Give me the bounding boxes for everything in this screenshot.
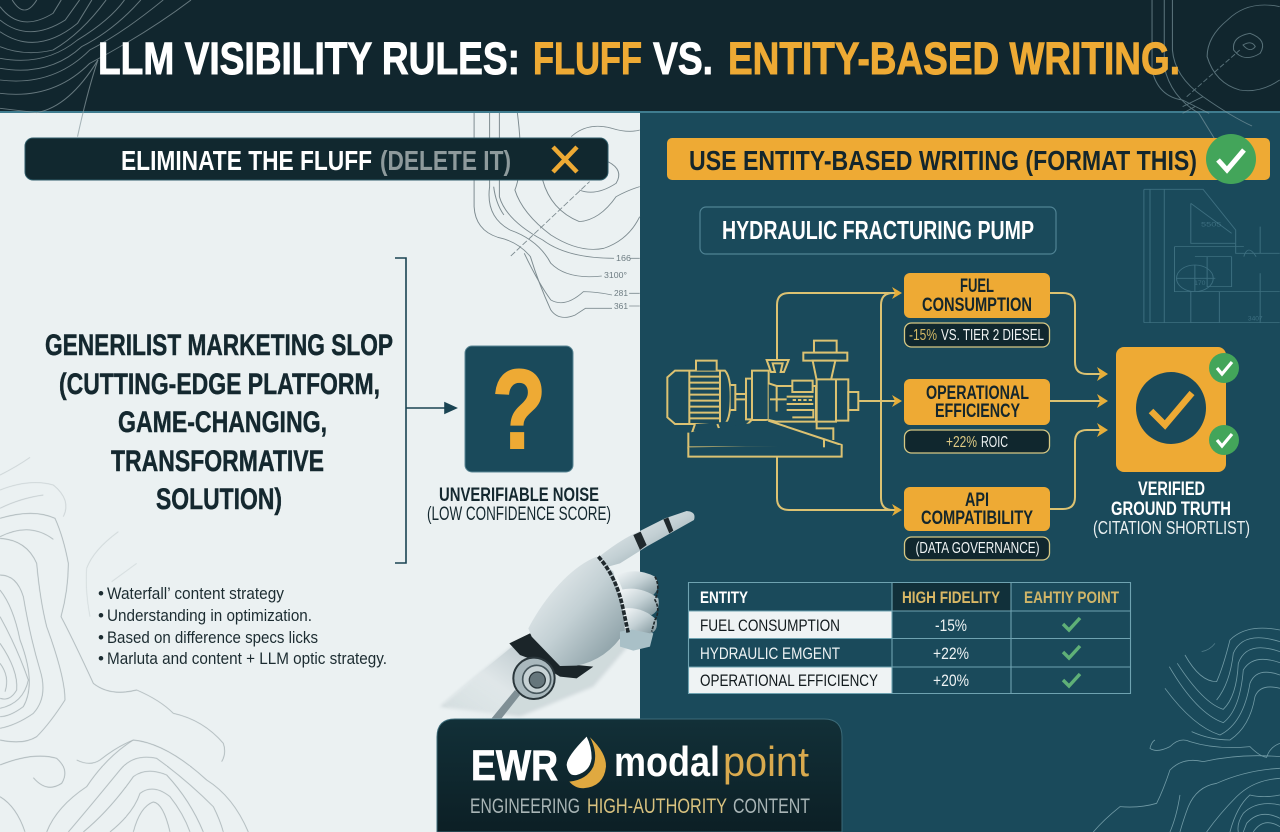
box: API compatibility: COMPATIBILITY [921, 508, 1033, 529]
background: left light panel [0, 112, 640, 832]
box: operational efficiency: OPERATIONAL [926, 383, 1029, 404]
table: entity comparison: FUEL CONSUMPTION [700, 616, 840, 635]
topographic labels: 361 [614, 301, 628, 311]
panel: logo [437, 719, 842, 832]
pill: ROIC metric: ROIC [981, 434, 1008, 451]
panel: eliminate the fluff heading [25, 138, 608, 180]
table: entity comparison [688, 582, 1131, 694]
icon: pump line drawing [667, 341, 858, 457]
icon: X mark [553, 147, 577, 172]
topographic labels [604, 253, 631, 311]
panel: eliminate the fluff heading: ELIMINATE THE FLUFF [121, 145, 372, 176]
table: entity comparison: HIGH FIDELITY [902, 588, 1001, 607]
generalist marketing slop text: GENERILIST MARKETING SLOP [45, 329, 393, 362]
topographic labels: 166 [616, 253, 631, 263]
topographic lines: header top left [0, 0, 191, 137]
logo tagline [470, 795, 810, 818]
hydraulic fracturing pump label: HYDRAULIC FRACTURING PUMP [722, 215, 1034, 245]
blueprint drawing: 3407 [1248, 314, 1263, 322]
header divider [0, 111, 1280, 113]
unverifiable noise label: UNVERIFIABLE NOISE [439, 485, 599, 506]
logo tagline: HIGH-AUTHORITY [587, 795, 727, 818]
title: ENTITY-BASED WRITING. [728, 33, 1180, 84]
table: entity comparison: ENTITY [700, 588, 749, 607]
pill: ROIC metric [904, 430, 1050, 453]
title: VS. [653, 33, 713, 84]
logo wordmark modalpoint: point [723, 738, 809, 785]
topographic lines: left panel upper right [474, 113, 640, 317]
generalist marketing slop text: (CUTTING-EDGE PLATFORM, [59, 368, 380, 401]
table: entity comparison: EAHTIY POINT [1024, 588, 1119, 607]
logo tagline: ENGINEERING [470, 795, 580, 818]
bullet list: • [98, 649, 104, 668]
illustration: robot hand [440, 511, 695, 718]
table: entity comparison: -15% [935, 616, 967, 635]
table: entity comparison: OPERATIONAL EFFICIENCY [700, 671, 878, 690]
icon: green check badge [1206, 134, 1256, 184]
bullet list: Understanding in optimization. [107, 606, 312, 625]
icon: oil drop [567, 737, 606, 788]
box: fuel consumption: CONSUMPTION [922, 295, 1032, 316]
icon: question mark card [465, 346, 573, 472]
box: fuel consumption [904, 273, 1050, 318]
topographic lines: header top right [1152, 0, 1280, 140]
verified ground truth label: GROUND TRUTH [1111, 499, 1231, 520]
blueprint drawing: 170 [1194, 279, 1205, 287]
background: right teal panel [640, 112, 1280, 832]
icon: green badge top [1209, 353, 1239, 383]
icon: verified check card [1116, 347, 1239, 472]
verified ground truth label [1093, 479, 1250, 538]
unverifiable noise label [427, 485, 611, 525]
pill: data governance: (DATA GOVERNANCE) [916, 540, 1040, 557]
topographic lines: right panel lower right [1093, 628, 1280, 832]
header band [0, 0, 1280, 112]
panel: entity-based writing heading [667, 134, 1270, 184]
bullet list [98, 584, 387, 668]
title: FLUFF [533, 33, 642, 84]
bullet list: • [98, 606, 104, 625]
logo wordmark modalpoint: modal [614, 738, 720, 785]
pill: data governance [904, 537, 1050, 560]
bullet list: • [98, 584, 104, 603]
logo wordmark modalpoint [614, 738, 809, 785]
table: entity comparison: HYDRAULIC EMGENT [700, 644, 840, 663]
title [98, 33, 1180, 84]
pill: fuel metric [904, 323, 1050, 347]
icon: green badge bottom [1209, 425, 1239, 455]
logo wordmark EWR: EWR [471, 742, 558, 790]
box: API compatibility: API [965, 490, 989, 511]
generalist marketing slop text: TRANSFORMATIVE [111, 445, 324, 478]
blueprint drawing [1144, 189, 1280, 323]
topographic labels: 281 [614, 288, 628, 298]
verified ground truth label: VERIFIED [1138, 479, 1205, 500]
topographic labels: 3100° [604, 270, 627, 280]
bullet list: Marluta and content + LLM optic strategy. [107, 649, 387, 668]
pill: fuel metric: VS. TIER 2 DIESEL [941, 327, 1044, 344]
bullet list: Based on difference specs licks [107, 628, 318, 647]
icon: question mark card: ? [492, 347, 546, 472]
box: API compatibility [904, 487, 1050, 531]
box: operational efficiency [904, 379, 1050, 425]
title: LLM VISIBILITY RULES: [98, 33, 520, 84]
panel: eliminate the fluff heading: (DELETE IT) [380, 145, 511, 176]
table: entity comparison: +22% [933, 644, 969, 663]
topographic lines: left panel lower left [0, 457, 248, 832]
box: fuel consumption: FUEL [960, 276, 994, 297]
blueprint drawing: 5505 [1201, 220, 1221, 228]
bullet list: Waterfall’ content strategy [107, 584, 284, 603]
unverifiable noise label: (LOW CONFIDENCE SCORE) [427, 504, 611, 525]
table: entity comparison: +20% [933, 671, 969, 690]
flow arrows [777, 287, 1108, 516]
bracket and arrow [395, 258, 456, 563]
generalist marketing slop text: GAME-CHANGING, [118, 406, 327, 439]
hydraulic fracturing pump label [700, 207, 1056, 254]
pill: fuel metric: -15% [909, 327, 937, 344]
generalist marketing slop text [45, 329, 393, 516]
logo tagline: CONTENT [733, 795, 810, 818]
pill: ROIC metric: +22% [946, 434, 977, 451]
bullet list: • [98, 628, 104, 647]
box: operational efficiency: EFFICIENCY [935, 401, 1020, 422]
generalist marketing slop text: SOLUTION) [156, 483, 282, 516]
